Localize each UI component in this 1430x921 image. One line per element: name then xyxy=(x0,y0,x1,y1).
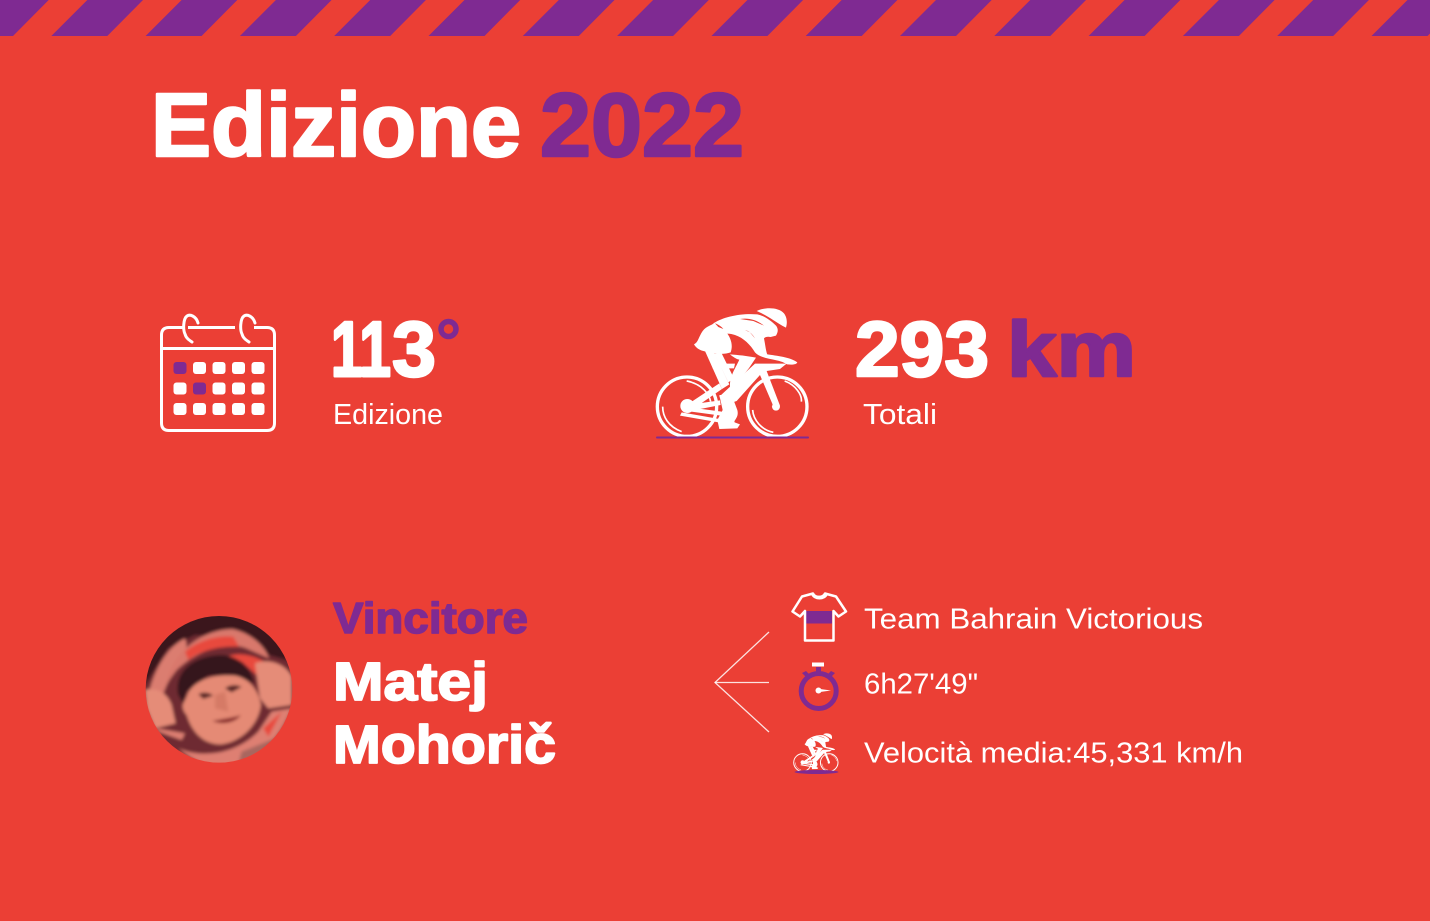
winner name: Mohorič xyxy=(333,715,556,775)
stat: 113 edition number: 11 xyxy=(331,305,391,393)
icon: jersey xyxy=(792,594,846,640)
label: Totali: Totali xyxy=(863,399,937,431)
stat: 293 km xyxy=(855,305,1136,393)
heading: Vincitore: Vincitore xyxy=(333,594,528,643)
winner name xyxy=(333,652,556,775)
label: Edizione: Edizione xyxy=(333,399,443,431)
stat: 293 km: 293 xyxy=(855,305,989,393)
title xyxy=(151,76,744,176)
title: 2022 xyxy=(540,76,744,176)
stat: 293 km: km xyxy=(1007,305,1136,393)
stat: 113 edition number: 3 xyxy=(392,305,436,393)
text: team: Team Bahrain Victorious xyxy=(864,604,1203,636)
icon: small cyclist xyxy=(794,733,838,774)
title: Edizione xyxy=(151,76,521,176)
text: average speed: Velocità media:45,331 km/h xyxy=(864,738,1243,770)
icon: cyclist xyxy=(656,308,809,438)
winner name: Matej xyxy=(333,652,488,712)
arrow: branching lines xyxy=(715,632,769,732)
top stripe band xyxy=(0,0,1430,36)
text: time: 6h27'49" xyxy=(864,668,978,700)
icon: calendar xyxy=(162,315,274,430)
stat: 113 edition number xyxy=(331,305,456,393)
winner photo xyxy=(146,616,292,763)
icon: stopwatch xyxy=(801,662,836,708)
